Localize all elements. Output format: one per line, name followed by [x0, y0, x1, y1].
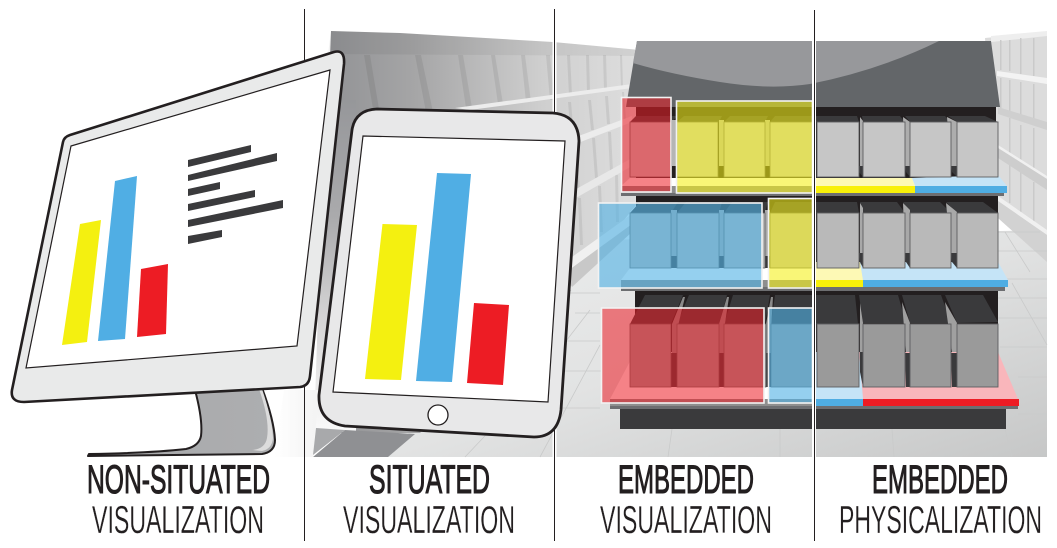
label: embedded visualization: [600, 458, 772, 542]
floor: [385, 230, 1047, 457]
tablet: [319, 109, 579, 437]
store aisle background: [274, 31, 1047, 457]
physical products row 2: [816, 202, 998, 268]
left products row 3: [630, 295, 812, 387]
label: situated visualization: VISUALIZATION: [343, 499, 515, 542]
yellow overlay middle shelf: [768, 198, 812, 288]
tablet home button: [428, 405, 448, 425]
display roof: [626, 41, 1000, 107]
display shelf backs: [635, 107, 998, 353]
blue overlay middle shelf: [598, 203, 762, 288]
tablet bar chart: [365, 173, 509, 385]
blue overlay bottom shelf: [768, 308, 812, 403]
physicalization shelf surfaces: [816, 175, 1019, 406]
pale fade left of divider: [274, 390, 319, 457]
tablet screen: [333, 136, 565, 402]
monitor bar chart: [62, 176, 168, 345]
label: non-situated visualization: NON-SITUATED: [87, 458, 270, 502]
red overlay bottom shelf: [602, 308, 764, 403]
right aisle shelving: [985, 31, 1047, 262]
label: embedded visualization: VISUALIZATION: [600, 499, 772, 542]
yellow overlay top shelf: [676, 101, 812, 193]
monitor screen: [26, 70, 330, 368]
physical products row 3: [816, 295, 998, 387]
left shelf surfaces: [610, 178, 815, 406]
white gap at second divider: [552, 30, 556, 458]
monitor stand: [88, 388, 275, 456]
red overlay top shelf: [622, 98, 671, 192]
left products row 1: [630, 116, 812, 177]
left aisle shelving: [314, 31, 640, 433]
label: non-situated visualization: VISUALIZATION: [92, 499, 264, 542]
label: embedded visualization: EMBEDDED: [618, 458, 754, 502]
label: situated visualization: SITUATED: [369, 458, 490, 502]
left products row 2: [630, 202, 812, 268]
desktop monitor: [12, 52, 344, 456]
shelf display: right half, embedded physicalization: [816, 116, 1019, 406]
physical products row 1: [816, 116, 998, 177]
white gap at third divider: [812, 30, 816, 458]
label: non-situated visualization: [87, 458, 270, 542]
dark floor base at left: [313, 428, 415, 457]
monitor text lines: [188, 145, 283, 244]
shelf display: left half, embedded visualization: [610, 41, 1000, 406]
floor tile lines: [465, 232, 1047, 457]
tablet body: [319, 109, 579, 437]
monitor body: [12, 52, 344, 402]
shelf lips and base: [610, 193, 1018, 429]
label: embedded physicalization: [839, 458, 1042, 542]
divider lines: [304, 9, 814, 541]
data overlays on shelves: [598, 98, 812, 403]
label: situated visualization: [343, 458, 515, 542]
